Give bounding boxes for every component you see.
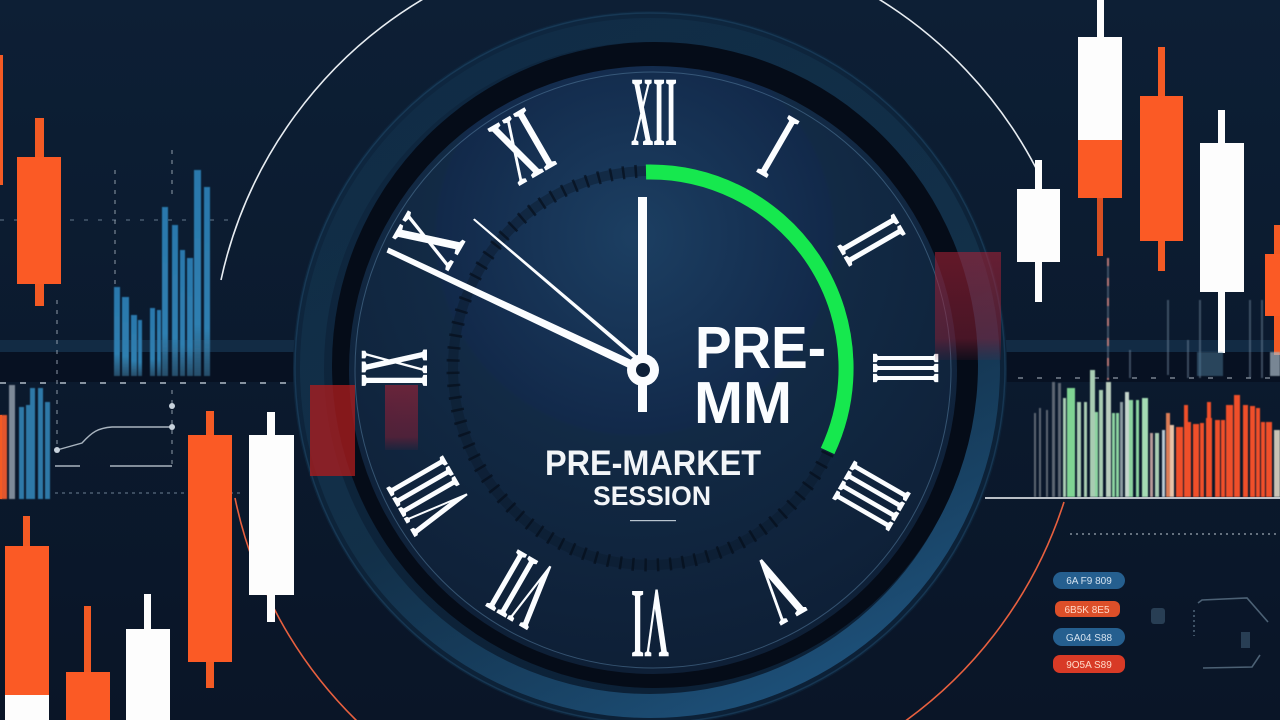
green progress arc: [646, 172, 846, 451]
label: pre-market session: PRE-MARKET: [545, 444, 761, 483]
faint upper right chart lines: [1108, 258, 1280, 380]
heading: PRE-MM: PRE-: [695, 315, 826, 381]
roman numerals: X: [371, 196, 485, 283]
band: horizontal data strip: [0, 220, 1280, 534]
roman numerals: II: [818, 201, 927, 279]
bar chart: blue volume bars: [114, 170, 210, 376]
icon: faint hexagon outline: [1151, 598, 1268, 668]
roman numerals: I: [744, 94, 812, 198]
line chart: small lower left trend: [54, 150, 175, 466]
roman numerals: XII: [631, 56, 677, 167]
bar chart: lower left blue bars: [0, 385, 50, 499]
legend pills: 6A F9 809: [1066, 576, 1112, 587]
roman numerals: VIII: [365, 443, 490, 549]
roman numerals: VII: [472, 530, 571, 651]
legend pills: 6B5K 8E5: [1064, 605, 1110, 616]
candlesticks: left group: [0, 55, 294, 720]
clock bezel: [293, 11, 1007, 720]
candlesticks: right group: [1017, 0, 1280, 355]
thin white arcs around the clock: [221, 0, 1036, 280]
legend pills: 9O5A S89: [1066, 660, 1112, 671]
roman numerals: V: [737, 534, 820, 646]
roman numerals: XI: [474, 86, 569, 205]
roman numerals: IIII: [813, 449, 932, 544]
roman numerals: VI: [631, 569, 669, 680]
clock face: [349, 66, 957, 674]
roman numerals: III: [851, 353, 962, 383]
tick ring: [453, 171, 847, 565]
label: pre-market session: SESSION: [593, 481, 711, 511]
legend pills: [1053, 572, 1125, 673]
translucent red overlay blocks: [310, 252, 1001, 476]
clock hands: [386, 197, 659, 412]
label: pre-market session: [545, 444, 761, 521]
legend pills: GA04 S88: [1066, 633, 1113, 644]
heading: PRE-MM: [694, 315, 826, 436]
roman numerals: IX: [338, 349, 449, 387]
thin orange arcs around the clock: [235, 498, 1064, 720]
heading: PRE-MM: MM: [694, 370, 792, 436]
bar chart: right green and red volume bars: [1034, 370, 1280, 497]
chart baseline: [985, 497, 1280, 499]
roman numerals: [338, 56, 962, 680]
